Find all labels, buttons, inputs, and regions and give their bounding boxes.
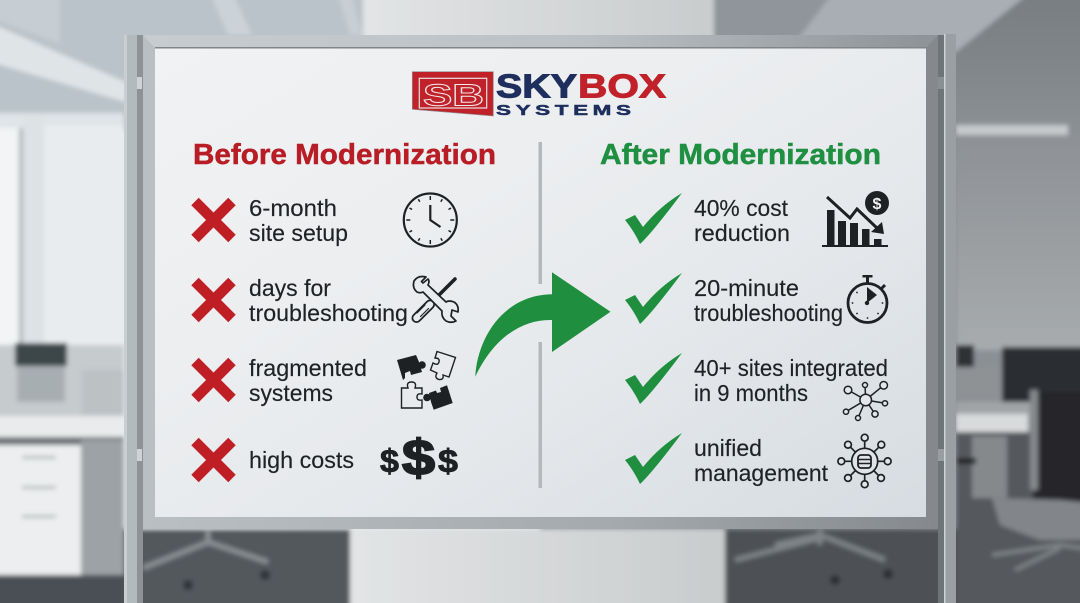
whiteboard frame (143, 35, 938, 529)
heading: after: After Modernization (600, 139, 881, 171)
item: days for troubleshooting (195, 275, 408, 326)
logo: Skybox Systems: SYSTEMS (496, 102, 631, 119)
icon: network hub (843, 382, 888, 420)
item: 20-minute troubleshooting: 20-minute (694, 275, 799, 301)
item: 40+ sites integrated in 9 months: 40+ sites integrated (694, 355, 888, 381)
divider (538, 142, 542, 488)
icon: stopwatch (848, 275, 887, 322)
logo: Skybox Systems: SB (423, 78, 484, 112)
icon: dollar signs: $ (438, 443, 458, 479)
icon: falling cost chart: $ (873, 196, 882, 213)
item: 20-minute troubleshooting (625, 273, 843, 326)
item: fragmented systems (195, 355, 367, 406)
item: fragmented systems: systems (249, 380, 333, 406)
item: 20-minute troubleshooting: troubleshooting (694, 300, 843, 326)
item: high costs (195, 442, 354, 478)
item: unified management: unified (694, 435, 762, 461)
icon: clock (404, 194, 457, 246)
arrow: before to after (475, 272, 610, 377)
icon: puzzle pieces (397, 352, 456, 410)
item: days for troubleshooting: days for (249, 275, 331, 301)
logo: Skybox Systems (412, 68, 667, 119)
icon: falling cost chart (822, 191, 889, 247)
icon: unified database hub (838, 434, 891, 488)
logo: Skybox Systems: SKY (496, 68, 577, 105)
centre column (363, 0, 714, 40)
under-board floor (124, 529, 957, 603)
item: days for troubleshooting: troubleshooting (249, 300, 408, 326)
item: 6-month site setup (195, 195, 348, 246)
logo: Skybox Systems: BOX (578, 68, 667, 105)
left office side (0, 0, 365, 603)
panel: before list (195, 194, 458, 486)
item: 40% cost reduction: 40% cost (694, 195, 789, 221)
item: unified management (625, 433, 829, 486)
icon: dollar signs: $ (402, 430, 435, 486)
item: high costs: high costs (249, 447, 354, 473)
item: unified management: management (694, 460, 829, 486)
item: 6-month site setup: site setup (249, 220, 348, 246)
panel: after list (625, 191, 891, 488)
item: 40% cost reduction (625, 193, 790, 246)
stand poles (124, 34, 956, 603)
heading: before: Before Modernization (193, 139, 496, 171)
icon: dollar signs: $ (380, 443, 399, 479)
item: 40+ sites integrated in 9 months (625, 353, 888, 406)
item: 40% cost reduction: reduction (694, 220, 790, 246)
icon: dollar signs (380, 430, 458, 486)
right office side (714, 0, 1080, 603)
item: 40+ sites integrated in 9 months: in 9 months (694, 380, 808, 406)
icon: tools (413, 276, 458, 322)
item: fragmented systems: fragmented (249, 355, 367, 381)
item: 6-month site setup: 6-month (249, 195, 337, 221)
